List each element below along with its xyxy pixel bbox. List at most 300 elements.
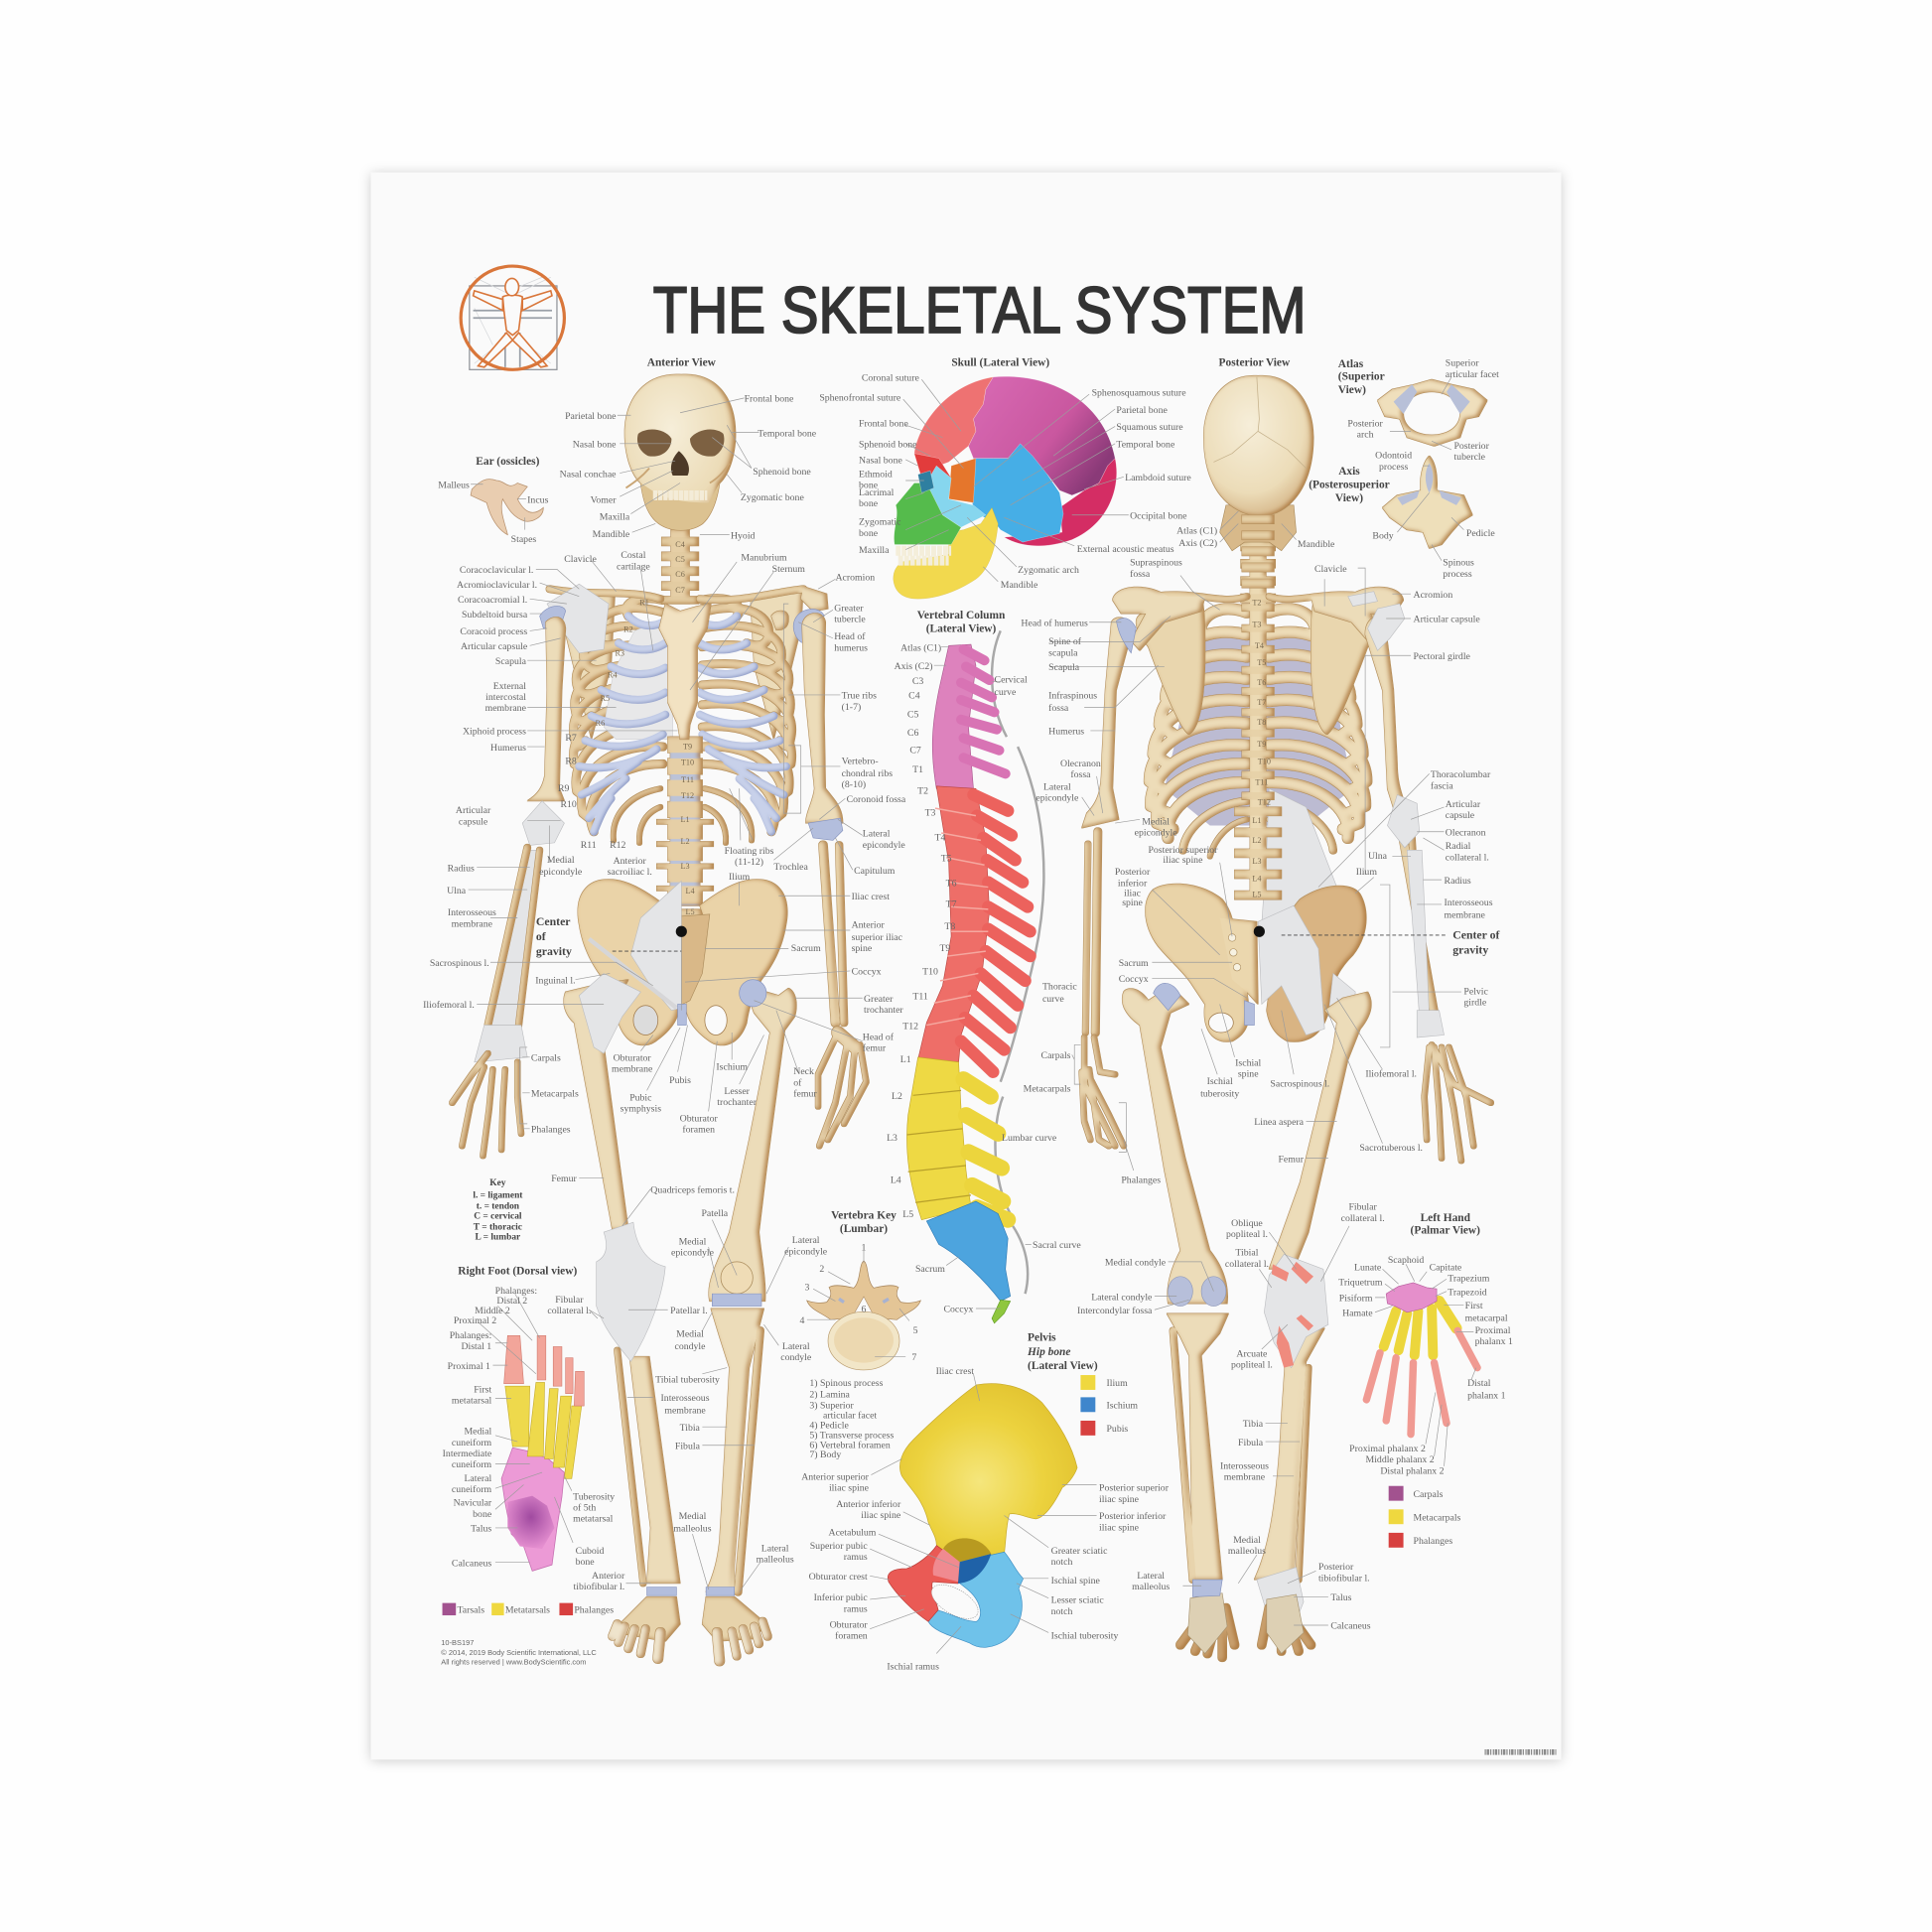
copyright: © 2014, 2019 Body Scientific International, LLC xyxy=(441,1648,597,1657)
pelvis anterior xyxy=(578,880,787,1045)
talus xyxy=(507,1496,554,1549)
labels: pelvis: Obturator xyxy=(830,1619,868,1630)
labels: axis xyxy=(1372,451,1495,580)
labels: anterior view: Patella xyxy=(701,1208,729,1219)
labels: left hand: Capitate xyxy=(1430,1263,1462,1274)
spine level labels: C7 xyxy=(675,586,685,595)
spine level labels: T12 xyxy=(1258,797,1271,806)
labels: posterior view: Articular xyxy=(1446,799,1481,810)
heading: vertebral column: Vertebral Column xyxy=(917,610,1006,621)
labels: pelvis: Iliac crest xyxy=(936,1366,974,1377)
labels: skull lateral: Sphenosquamous suture xyxy=(1092,387,1186,398)
labels: pelvis: notch xyxy=(1051,1557,1073,1568)
labels: vertebral column: C6 xyxy=(907,728,918,739)
spine level labels: T2 xyxy=(1252,598,1261,607)
labels: anterior view: Frontal bone xyxy=(745,394,794,405)
legend: pelvis: Ischium xyxy=(1106,1401,1138,1412)
heading: atlas: Atlas xyxy=(1338,358,1364,370)
heading: vertebra key: Vertebra Key xyxy=(831,1209,897,1221)
labels: posterior view: girdle xyxy=(1463,998,1487,1009)
labels: anterior view: Phalanges xyxy=(531,1125,571,1136)
legend: hand: Metacarpals xyxy=(1414,1512,1461,1523)
labels: posterior view: Lateral condyle xyxy=(1091,1292,1153,1303)
labels: anterior view: Temporal bone xyxy=(758,428,817,439)
labels: posterior view: Posterior superior xyxy=(1148,845,1218,856)
key: abbreviations: l. = ligament xyxy=(473,1190,523,1200)
labels: anterior view: Inguinal l. xyxy=(535,975,576,986)
labels: posterior view: Acromion xyxy=(1414,590,1452,601)
labels: anterior view: R11 xyxy=(581,840,597,851)
labels: anterior view: Trochlea xyxy=(773,862,809,873)
anterior feet xyxy=(613,1596,767,1661)
panel: posterior skeleton xyxy=(1082,517,1491,1657)
heading: left hand xyxy=(1411,1212,1480,1236)
labels: posterior view: Scapula xyxy=(1048,662,1080,673)
key: abbreviations: C = cervical xyxy=(474,1211,522,1221)
labels: anterior view: Center xyxy=(536,914,571,928)
labels: left hand: Proximal phalanx 2 xyxy=(1349,1444,1426,1454)
labels: posterior view: Tibia xyxy=(1243,1419,1264,1430)
labels: anterior view: (11-12) xyxy=(735,857,763,868)
labels: axis: process xyxy=(1443,569,1472,580)
labels: anterior view: Pubis xyxy=(669,1075,691,1086)
labels: anterior view: Coracoid process xyxy=(460,626,527,637)
labels: posterior view: Articular capsule xyxy=(1414,615,1480,625)
labels: left hand: Middle phalanx 2 xyxy=(1365,1454,1435,1465)
labels: posterior view: iliac spine xyxy=(1163,855,1203,866)
posterior joint capsules xyxy=(1116,592,1445,1037)
labels: posterior view: Radius xyxy=(1445,876,1471,887)
labels: posterior view: Medial condyle xyxy=(1105,1258,1167,1269)
labels: anterior view: of xyxy=(536,929,547,943)
labels: anterior view: Iliofemoral l. xyxy=(423,1000,475,1011)
heading: pelvis: (Lateral View) xyxy=(1028,1360,1098,1372)
labels: skull lateral: Frontal bone xyxy=(859,418,908,429)
labels: posterior view: Metacarpals xyxy=(1024,1084,1071,1095)
labels: posterior view: Ischial xyxy=(1235,1058,1262,1069)
labels: right foot: Proximal 1 xyxy=(448,1361,490,1372)
labels: anterior view: epicondyle xyxy=(784,1246,828,1257)
spine level labels: T10 xyxy=(681,759,694,767)
labels: anterior view: membrane xyxy=(452,918,493,929)
labels: posterior view: Ilium xyxy=(1356,867,1377,878)
spine level labels: R5 xyxy=(601,694,610,703)
labels: posterior view: Pectoral girdle xyxy=(1414,651,1471,662)
labels: anterior view: tibiofibular l. xyxy=(574,1582,624,1592)
labels: vertebra key: 4) Pedicle xyxy=(809,1420,849,1431)
labels: anterior view: of xyxy=(793,1077,802,1088)
panel: anterior skeleton xyxy=(452,530,866,1661)
zygomatic xyxy=(924,466,986,527)
labels: vertebra key: 3 xyxy=(804,1282,809,1293)
labels: anterior view: collateral l. xyxy=(547,1306,591,1316)
labels: anterior view: Interosseous xyxy=(448,907,496,918)
legend: hand: Phalanges xyxy=(1414,1536,1452,1547)
heading: ear ossicles: Ear (ossicles) xyxy=(476,456,540,468)
labels: anterior view: Coracoclavicular l. xyxy=(460,565,533,576)
labels: right foot: First xyxy=(474,1384,491,1395)
heading: atlas: (Superior xyxy=(1338,370,1385,382)
anterior scapulae and ligaments xyxy=(562,589,803,740)
labels: posterior view: Fibula xyxy=(1238,1438,1264,1449)
labels: vertebra key: 1 xyxy=(862,1243,867,1254)
labels: vertebral column: T4 xyxy=(934,832,945,843)
labels: skull lateral: bone xyxy=(859,528,879,539)
labels: skull lateral: bone xyxy=(859,480,879,490)
key: abbreviations xyxy=(473,1178,523,1243)
spine level labels: L5 xyxy=(1252,890,1261,898)
labels: anterior view: Lateral xyxy=(782,1341,810,1352)
spine level labels: L2 xyxy=(680,837,690,846)
coccyx xyxy=(992,1300,1011,1323)
labels: vertebral column: T5 xyxy=(941,854,952,865)
labels: skull lateral: bone xyxy=(859,498,879,509)
labels: posterior view: Ischial xyxy=(1207,1076,1233,1087)
labels: anterior view: Sacrum xyxy=(791,943,821,954)
labels: pelvis: Obturator crest xyxy=(809,1572,868,1583)
labels: atlas: articular facet xyxy=(1446,369,1499,380)
labels: anterior view: Obturator xyxy=(614,1053,651,1064)
labels: anterior view: Metacarpals xyxy=(531,1089,579,1100)
labels: vertebral column: Sacrum xyxy=(915,1264,945,1275)
labels: posterior view: Humerus xyxy=(1048,727,1084,738)
labels: anterior view: foramen xyxy=(682,1125,715,1136)
labels: left hand: Proximal xyxy=(1475,1325,1511,1336)
obturator foramen xyxy=(926,1578,984,1625)
labels: posterior view: Linea aspera xyxy=(1254,1117,1305,1128)
labels: vertebra key: articular facet xyxy=(823,1410,877,1421)
labels: vertebral column: Lumbar curve xyxy=(1002,1133,1057,1144)
labels: skull lateral: External acoustic meatus xyxy=(1077,544,1174,555)
labels: right foot: Calcaneus xyxy=(452,1558,491,1569)
leader lines posterior xyxy=(1049,511,1461,1625)
labels: pelvis: iliac spine xyxy=(1099,1522,1140,1533)
phalanges xyxy=(1366,1330,1477,1435)
labels: left hand: Distal xyxy=(1467,1378,1491,1389)
labels: skull lateral: Sphenofrontal suture xyxy=(819,392,901,403)
labels: posterior view: malleolus xyxy=(1228,1546,1266,1557)
labels: anterior view: Vomer xyxy=(591,494,617,505)
spine level labels: T5 xyxy=(1257,658,1266,667)
parietal bone xyxy=(968,376,1115,495)
spine level labels: L4 xyxy=(685,887,695,896)
labels: anterior view: Nasal conchae xyxy=(560,469,617,480)
labels: posterior view: spine xyxy=(1122,897,1144,908)
labels: anterior view: Humerus xyxy=(490,743,526,754)
labels: skull lateral: Temporal bone xyxy=(1116,440,1175,451)
labels: atlas: Superior xyxy=(1446,358,1479,369)
posterior ankles xyxy=(1257,1568,1304,1626)
labels: right foot: Proximal 2 xyxy=(454,1315,496,1326)
key: abbreviations: t. = tendon xyxy=(477,1201,520,1211)
legend: foot: Phalanges xyxy=(574,1605,614,1616)
labels: right foot: Medial xyxy=(464,1427,491,1438)
heading: vertebral column: (Lateral View) xyxy=(926,623,997,635)
spine level labels: R6 xyxy=(596,719,605,728)
labels: posterior view: Head of humerus xyxy=(1021,618,1088,628)
labels: right foot: of 5th xyxy=(573,1503,596,1514)
labels: anterior view: Acromion xyxy=(835,573,875,584)
acetabulum xyxy=(943,1538,991,1562)
labels: anterior view: Coracoacromial l. xyxy=(458,595,527,606)
barcode xyxy=(1484,1750,1556,1754)
labels: left hand: Trapezium xyxy=(1448,1274,1490,1285)
key: abbreviations: T = thoracic xyxy=(474,1223,522,1233)
labels: right foot: metatarsal xyxy=(452,1396,491,1407)
labels: vertebral column: T8 xyxy=(944,921,955,932)
panel: pelvis hip bone xyxy=(888,1384,1077,1647)
labels: anterior view: cartilage xyxy=(617,561,650,572)
posterior hip and knee joints xyxy=(1154,983,1226,1307)
labels: anterior view: condyle xyxy=(674,1341,706,1352)
labels: vertebra key: 7) Body xyxy=(809,1449,841,1460)
leader lines skull and column xyxy=(807,379,1129,1356)
labels: anterior view: membrane xyxy=(485,703,527,714)
patellar tendon and quadriceps xyxy=(597,1222,665,1361)
labels: anterior view: Manubrium xyxy=(741,553,787,564)
heading: pelvis: Hip bone xyxy=(1027,1346,1070,1358)
labels: left hand: phalanx 1 xyxy=(1467,1391,1506,1402)
brow region xyxy=(914,454,951,487)
labels: right foot: Talus xyxy=(471,1524,491,1535)
labels: anterior view: Pubic xyxy=(629,1092,652,1103)
labels: posterior view: Posterior xyxy=(1115,867,1151,878)
labels: posterior view: fossa xyxy=(1130,569,1151,580)
teeth xyxy=(896,551,951,561)
labels: anterior view: Medial xyxy=(547,855,575,866)
sphenoid xyxy=(949,459,976,502)
posterior knee capsule xyxy=(1264,1254,1328,1368)
labels: anterior view: Xiphoid process xyxy=(463,727,526,738)
labels: anterior view: Greater xyxy=(864,994,894,1005)
labels: vertebral column: C4 xyxy=(908,691,920,702)
labels: pelvis: notch xyxy=(1051,1606,1073,1617)
frontal bone xyxy=(914,377,993,466)
labels: posterior view: iliac xyxy=(1124,888,1142,898)
labels: anterior view: Lesser xyxy=(724,1086,751,1097)
labels: right foot: cuneiform xyxy=(452,1438,492,1449)
labels: anterior view: Lateral xyxy=(863,829,891,840)
labels: posterior view: Calcaneus xyxy=(1330,1621,1371,1632)
labels: left hand: Lunate xyxy=(1354,1263,1382,1274)
spine level labels: T11 xyxy=(1255,778,1268,787)
labels: right foot: Phalanges: xyxy=(495,1286,537,1297)
labels: vertebral column: T10 xyxy=(922,967,938,978)
labels: posterior view: Lateral xyxy=(1043,782,1071,793)
labels: left hand: Triquetrum xyxy=(1338,1277,1383,1288)
labels: vertebral column: C7 xyxy=(909,745,921,756)
labels: anterior view: Maxilla xyxy=(600,512,630,523)
labels: posterior view: gravity xyxy=(1452,943,1488,957)
labels: anterior view: Fibular xyxy=(555,1295,584,1306)
labels: posterior view: membrane xyxy=(1445,910,1486,921)
labels: anterior view: epicondyle xyxy=(671,1248,715,1259)
labels: anterior view: Lateral xyxy=(761,1544,789,1555)
heading: left hand: Left Hand xyxy=(1421,1212,1471,1224)
heading: vertebra key xyxy=(831,1209,897,1235)
labels: anterior view: trochanter xyxy=(864,1005,903,1016)
labels: posterior view: Arcuate xyxy=(1236,1348,1268,1359)
labels: posterior view: Tibial xyxy=(1235,1248,1259,1259)
labels: axis: process xyxy=(1379,462,1409,473)
labels: anterior view: femur xyxy=(863,1043,887,1054)
posterior neck xyxy=(1245,515,1271,594)
labels: anterior view: Neck xyxy=(793,1066,814,1077)
labels: posterior view: Radial xyxy=(1446,841,1471,852)
spine level labels: T11 xyxy=(681,775,694,784)
key: abbreviations: Key xyxy=(489,1178,506,1188)
labels: vertebra key: 5) Transverse process xyxy=(809,1430,894,1441)
spine level labels: R1 xyxy=(639,598,649,607)
labels: anterior view: (8-10) xyxy=(842,779,866,790)
labels: atlas: arch xyxy=(1357,430,1374,441)
labels: vertebral column: Coccyx xyxy=(944,1305,974,1315)
heading: atlas: View) xyxy=(1338,384,1366,396)
metatarsals xyxy=(505,1382,582,1478)
labels: posterior view: Fibular xyxy=(1348,1202,1378,1213)
labels: pelvis: Greater sciatic xyxy=(1051,1546,1108,1557)
labels: anterior view: Carpals xyxy=(531,1053,561,1064)
labels: vertebra key xyxy=(799,1243,918,1460)
labels: anterior view: spine xyxy=(852,943,873,954)
labels: skull lateral: Zygomatic xyxy=(859,517,901,528)
spine level labels: T4 xyxy=(1255,641,1264,650)
labels: skull lateral: Coronal suture xyxy=(862,372,919,383)
cervical vertebrae xyxy=(932,644,1006,788)
posterior arm bones xyxy=(1082,618,1436,1033)
labels: left hand: Trapezoid xyxy=(1448,1287,1487,1298)
labels: anterior view: R9 xyxy=(558,783,569,794)
labels: vertebra key: 1) Spinous process xyxy=(809,1378,884,1389)
legend: pelvis xyxy=(1080,1375,1138,1436)
legend: hand: Carpals xyxy=(1414,1489,1444,1500)
hip and knee joints xyxy=(579,973,766,1307)
labels: atlas xyxy=(1347,358,1499,463)
posterior lower legs xyxy=(1167,1313,1324,1580)
labels: anterior view: Lateral xyxy=(792,1235,820,1246)
labels: atlas: Posterior xyxy=(1453,441,1490,452)
sacrum xyxy=(926,1201,1011,1302)
labels: anterior view: Sphenoid bone xyxy=(753,467,811,478)
labels: anterior view: Costal xyxy=(621,550,646,561)
labels: vertebra key: 5 xyxy=(913,1325,918,1336)
labels: posterior view: tibiofibular l. xyxy=(1318,1573,1370,1584)
labels: vertebral column: T9 xyxy=(939,943,950,954)
spine level labels: L1 xyxy=(1252,816,1261,825)
temporal bone xyxy=(971,444,1063,542)
panel: right foot dorsal xyxy=(501,1335,584,1571)
labels: anterior view: superior iliac xyxy=(852,932,903,943)
labels: posterior view xyxy=(1021,525,1501,1632)
labels: anterior view: True ribs xyxy=(842,691,877,702)
labels: anterior view: epicondyle xyxy=(539,867,583,878)
labels: posterior view: Axis (C2) xyxy=(1178,538,1217,549)
thoracic vertebrae xyxy=(918,786,1031,1072)
sternum xyxy=(659,604,711,740)
spine level labels: T3 xyxy=(1252,621,1261,629)
labels: pelvis: Anterior superior xyxy=(801,1472,870,1483)
labels: vertebral column xyxy=(887,642,1081,1315)
labels: right foot: Intermediate xyxy=(443,1449,492,1459)
icon: vitruvian man logo xyxy=(461,266,564,369)
labels: right foot: Tuberosity xyxy=(573,1491,615,1502)
labels: anterior view: Articular capsule xyxy=(461,641,528,652)
labels: pelvis: iliac spine xyxy=(861,1510,901,1521)
carpals xyxy=(1386,1283,1437,1312)
labels: anterior view: Subdeltoid bursa xyxy=(462,610,528,621)
labels: vertebral column: T12 xyxy=(902,1021,918,1032)
labels: vertebral column: Sacral curve xyxy=(1033,1240,1081,1251)
panel: lateral skull xyxy=(894,376,1117,599)
spine level labels: T9 xyxy=(1257,740,1266,749)
heading: posterior view: Posterior View xyxy=(1219,357,1291,369)
labels: pelvis: ramus xyxy=(844,1552,868,1563)
spine level labels: R3 xyxy=(615,648,624,657)
spine level labels: T7 xyxy=(1257,698,1266,707)
labels: skull lateral: Maxilla xyxy=(859,545,890,556)
spine level labels: C4 xyxy=(675,540,685,549)
labels: posterior view: Carpals xyxy=(1041,1050,1071,1061)
labels: posterior view: Thoracolumbar xyxy=(1431,769,1491,780)
heading: pelvis xyxy=(1027,1331,1098,1372)
labels: vertebral column: curve xyxy=(995,687,1017,698)
labels: pelvis: Lesser sciatic xyxy=(1051,1595,1104,1606)
labels: anterior view: Clavicle xyxy=(564,554,598,565)
labels: anterior view: symphysis xyxy=(621,1103,661,1114)
labels: posterior view: fascia xyxy=(1431,780,1453,791)
anterior arm bones xyxy=(527,614,843,823)
labels: posterior view: Mandible xyxy=(1298,539,1335,550)
labels: posterior view: fossa xyxy=(1070,769,1091,780)
icon: ear ossicles xyxy=(471,480,543,535)
labels: posterior view: Coccyx xyxy=(1119,974,1149,985)
posterior hands xyxy=(1082,1037,1491,1161)
curve lines xyxy=(992,630,1043,1294)
icon: atlas vertebra xyxy=(1378,379,1487,446)
labels: anterior view: Coronoid fossa xyxy=(847,794,906,805)
labels: anterior view: Medial xyxy=(679,1236,707,1247)
labels: right foot: cuneiform xyxy=(452,1459,492,1470)
labels: posterior view: Posterior xyxy=(1318,1562,1354,1573)
labels: anterior view: Fibula xyxy=(675,1441,701,1451)
labels: anterior view: R10 xyxy=(560,799,577,810)
labels: posterior view: Interosseous xyxy=(1445,897,1493,908)
labels: axis: Odontoid xyxy=(1375,451,1412,462)
key: abbreviations: L = lumbar xyxy=(476,1233,520,1243)
labels: posterior view: popliteal l. xyxy=(1231,1360,1273,1371)
copyright: All rights reserved | www.BodyScientific.com xyxy=(441,1658,586,1667)
labels: posterior view: Lateral xyxy=(1137,1571,1165,1582)
labels: anterior view: Articular xyxy=(456,805,491,816)
maxilla xyxy=(894,483,961,545)
labels: anterior view: membrane xyxy=(664,1406,706,1417)
labels: posterior view: Supraspinous xyxy=(1130,558,1182,569)
labels: posterior view: Olecranon xyxy=(1446,827,1486,838)
labels: anterior view: Tibial tuberosity xyxy=(655,1374,720,1385)
legend: pelvis: Ilium xyxy=(1106,1378,1128,1389)
labels: posterior view: membrane xyxy=(1224,1472,1266,1483)
intercostal membrane xyxy=(604,617,673,740)
labels: vertebral column: L5 xyxy=(902,1209,913,1220)
thoracolumbar fascia xyxy=(1262,788,1337,1004)
lumbar vertebrae xyxy=(906,1057,1008,1220)
labels: vertebral column: L4 xyxy=(891,1174,901,1185)
spine level labels: C6 xyxy=(675,570,685,579)
labels: right foot: Cuboid xyxy=(576,1546,605,1557)
labels: vertebra key: 3) Superior xyxy=(809,1401,854,1412)
labels: anterior view xyxy=(423,394,906,1592)
labels: anterior view: Patellar l. xyxy=(670,1306,708,1316)
